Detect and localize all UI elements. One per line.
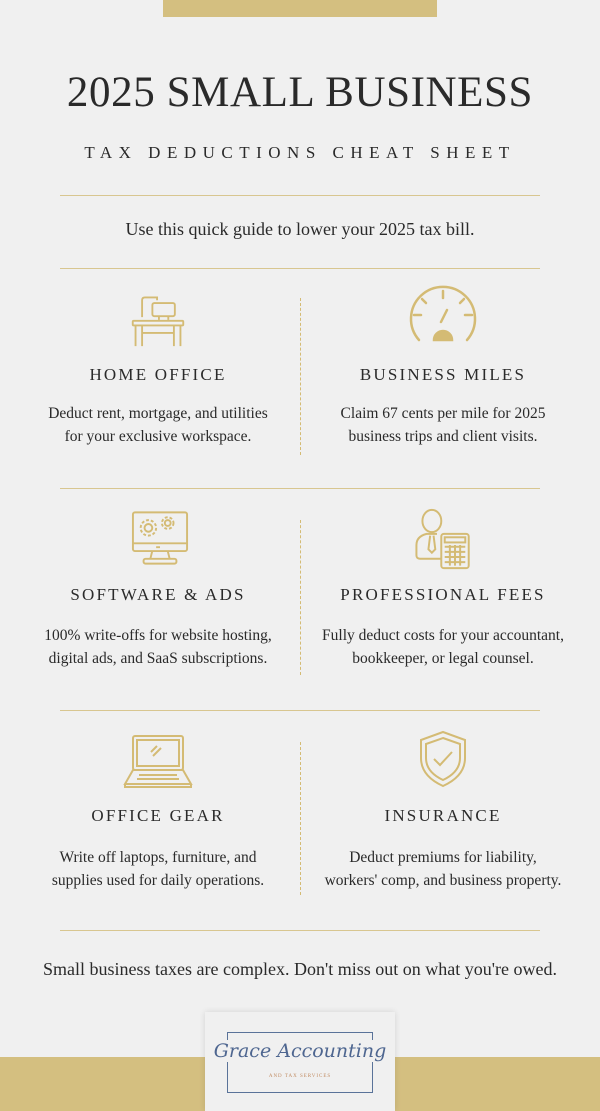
subtitle: TAX DEDUCTIONS CHEAT SHEET: [84, 143, 516, 162]
heading: software & ads: SOFTWARE & ADS: [70, 585, 246, 604]
icon: desk: [132, 296, 184, 346]
icon: monitor gears: [132, 511, 188, 565]
intro text: Use this quick guide to lower your 2025 tax bill.: [126, 219, 474, 239]
top gold bar: [163, 0, 437, 17]
text: business miles: Claim 67 cents per mile for 2025: [341, 405, 545, 422]
icon: shield check: [420, 730, 466, 787]
text: home office: [48, 405, 268, 445]
text: office gear: Write off laptops, furniture, and: [59, 849, 257, 866]
icon: accountant calculator: [415, 508, 470, 570]
text: home office: Deduct rent, mortgage, and utilities: [48, 405, 268, 422]
text: software & ads: digital ads, and SaaS subscriptions.: [49, 650, 267, 667]
text: business miles: business trips and client visits.: [348, 428, 538, 445]
heading: insurance: INSURANCE: [384, 806, 502, 825]
text: professional fees: [322, 627, 564, 667]
title: 2025 SMALL BUSINESS: [67, 69, 533, 116]
text: home office: for your exclusive workspace.: [65, 428, 251, 445]
text: office gear: [52, 849, 264, 889]
text: professional fees: Fully deduct costs for your accountant,: [322, 627, 564, 644]
heading: office gear: OFFICE GEAR: [91, 806, 225, 825]
logo card: [205, 1012, 395, 1111]
icon: laptop: [123, 735, 193, 788]
bottom gold band: [0, 1057, 600, 1111]
logo script: Grace Accounting: [214, 1040, 386, 1062]
text: professional fees: bookkeeper, or legal counsel.: [352, 650, 534, 667]
text: insurance: [324, 849, 561, 889]
text: software & ads: 100% write-offs for website hosting,: [44, 627, 272, 644]
text: insurance: Deduct premiums for liability,: [349, 849, 537, 866]
footer text: Small business taxes are complex. Don't miss out on what you're owed.: [43, 959, 557, 979]
heading: home office: HOME OFFICE: [89, 365, 227, 384]
text: business miles: [341, 405, 545, 445]
text: insurance: workers' comp, and business property.: [325, 872, 561, 889]
heading: business miles: BUSINESS MILES: [360, 365, 526, 384]
logo tagline: AND TAX SERVICES: [269, 1074, 331, 1079]
text: office gear: supplies used for daily operations.: [52, 872, 264, 889]
heading: professional fees: PROFESSIONAL FEES: [340, 585, 546, 604]
icon: speedometer: [410, 286, 476, 342]
text: software & ads: [44, 627, 272, 667]
